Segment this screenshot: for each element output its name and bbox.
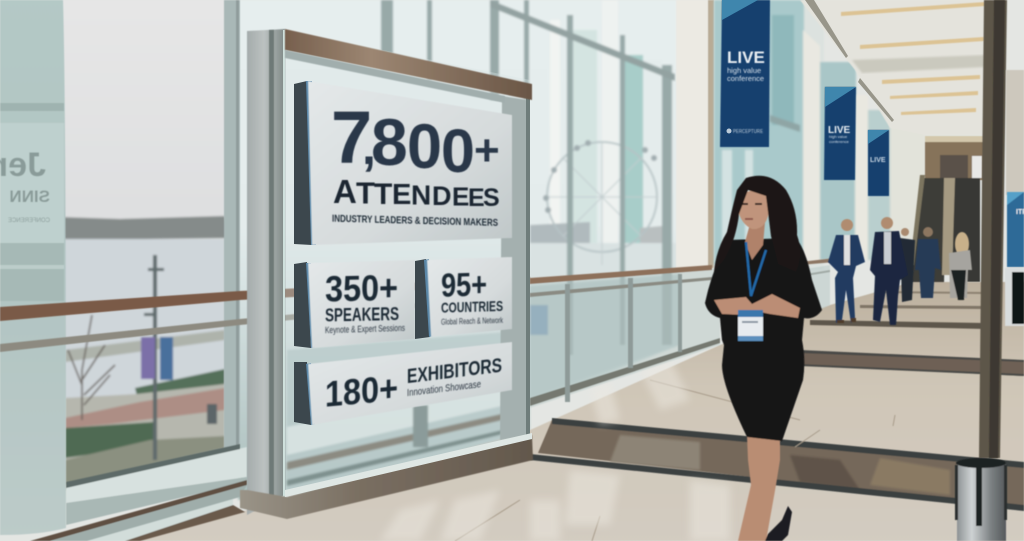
- banner: LIVE small: LIVE: [870, 157, 886, 164]
- left structural window frame: [30, 0, 247, 541]
- right wall behind post: [1006, 70, 1024, 195]
- panel: speakers: [294, 260, 415, 348]
- sign: top wooden cap: [285, 29, 532, 100]
- label: countries: COUNTRIES: [441, 298, 503, 317]
- background people: [828, 217, 972, 325]
- person: man with grey shirt center: [870, 217, 908, 325]
- banner: LIVE large: PERCEPTURE: [733, 129, 763, 135]
- woman: hair: [714, 176, 800, 272]
- number: 180+: 180+: [325, 367, 398, 415]
- left cylindrical column: [0, 0, 66, 535]
- label: attendees: T: [356, 176, 375, 210]
- corridor floor: [128, 282, 1024, 541]
- floor: light reflections: [380, 358, 730, 541]
- wooden hand rail across window: [0, 277, 530, 321]
- label: attendees: E: [468, 184, 485, 212]
- person: woman with blonde hair: [949, 232, 972, 300]
- woman: neck: [745, 222, 765, 260]
- woman: lanyard: [746, 242, 766, 296]
- label: attendees: E: [392, 179, 411, 211]
- banner: LIVE large: high value: [727, 66, 761, 75]
- banner: LIVE medium: LIVE: [828, 125, 851, 136]
- woman: face: [738, 190, 769, 229]
- label: attendees: A: [333, 173, 357, 210]
- panel: exhibitors: [294, 342, 512, 425]
- trash bin: [955, 458, 1007, 541]
- column: mirrored reflected lettering: CONFERENCE: [8, 218, 50, 224]
- banner: LIVE medium: [824, 87, 856, 180]
- display sign: [240, 29, 533, 519]
- label: attendees: E: [452, 182, 469, 212]
- column: mirrored reflected lettering: [0, 146, 50, 224]
- steel lower rail across window: [0, 293, 530, 352]
- banner: LIVE medium: conference: [829, 139, 850, 144]
- tagline: speakers: Keynote & Expert Sessions: [325, 323, 405, 335]
- label: attendees: S: [483, 184, 500, 212]
- banner: LIVE large: LIVE: [727, 48, 765, 67]
- glass balustrade: [530, 258, 835, 408]
- woman: legs and shoes: [738, 436, 792, 541]
- column: mirrored reflected lettering: SINN: [9, 187, 50, 206]
- tagline: attendees: INDUSTRY LEADERS & DECISION MAKERS: [332, 213, 498, 229]
- banner: LIVE large: [720, 0, 770, 147]
- ceiling: [800, 0, 990, 135]
- banner: LIVE large: conference: [727, 74, 764, 83]
- sign: glass pane: [285, 30, 530, 495]
- headline: 7,800+: ,: [362, 119, 376, 175]
- headline: 7,800+: 7: [331, 96, 372, 179]
- outdoor view through left window: [60, 0, 230, 490]
- woman: hands: [714, 294, 800, 318]
- label: attendees: N: [411, 180, 431, 210]
- headline: 7,800+: +: [474, 126, 500, 175]
- headline: 7,800+: 0: [407, 112, 442, 182]
- sign: base: [240, 435, 533, 519]
- right edge sign stand: [1005, 192, 1024, 326]
- right tall post: [979, 0, 1007, 458]
- label: exhibitors: EXHIBITORS: [407, 355, 502, 388]
- center windows behind the sign: [238, 0, 680, 500]
- person: man left in blue blazer: [828, 219, 865, 323]
- ceiling lights: [841, 2, 985, 115]
- person: man in dark suit behind: [900, 228, 915, 302]
- corridor back wall and windows: [714, 0, 925, 270]
- panel: countries: [415, 257, 512, 339]
- tagline: exhibitors: Innovation Showcase: [407, 379, 481, 399]
- sign: window shapes visible through glass: [287, 330, 528, 490]
- woman: eyes and lips: [742, 203, 762, 220]
- label: attendees: D: [432, 181, 452, 211]
- sign: right steel post: [500, 96, 528, 440]
- label: attendees: T: [374, 178, 392, 211]
- label: speakers: SPEAKERS: [325, 304, 399, 325]
- woman walking: [705, 176, 822, 541]
- person: man in navy back view: [915, 227, 941, 298]
- woman: name badge: [738, 310, 763, 341]
- column: right of windows: [676, 0, 714, 272]
- sign: left steel post: [247, 29, 285, 515]
- panel: attendees: [294, 81, 512, 245]
- banner: LIVE small: [868, 130, 889, 196]
- banner: LIVE medium: high value: [829, 134, 848, 139]
- tagline: countries: Global Reach & Network: [441, 315, 503, 327]
- floor: dark marble bands: [455, 291, 1024, 541]
- headline: 7,800+: 0: [441, 117, 475, 185]
- headline: 7,800+: 8: [371, 105, 408, 179]
- number: 350+: 350+: [325, 267, 398, 309]
- number: 95+: 95+: [441, 265, 487, 304]
- woman: dress and blazer: [705, 238, 822, 441]
- back of hall and escalators: [908, 136, 985, 285]
